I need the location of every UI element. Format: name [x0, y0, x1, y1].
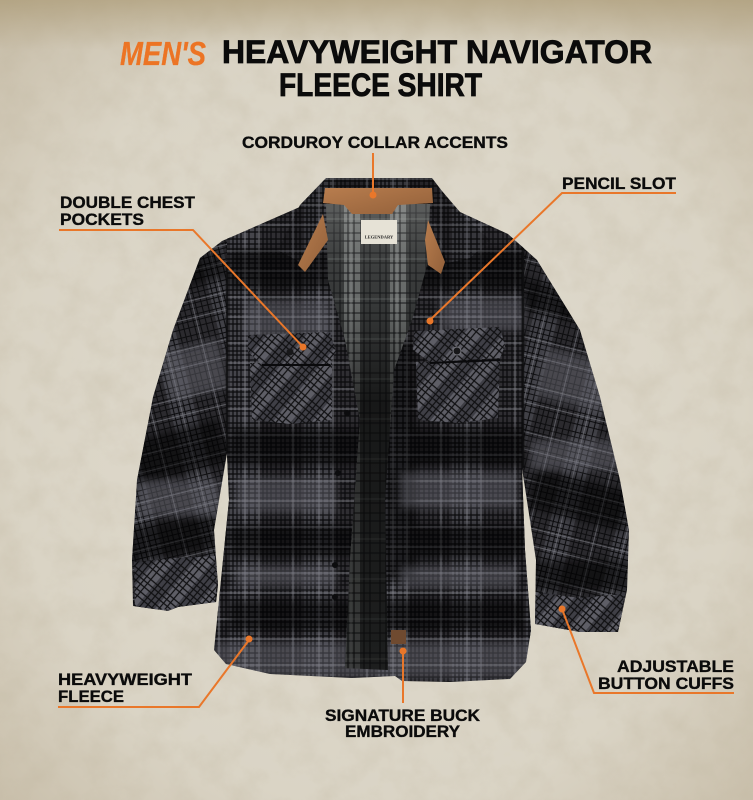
buck embroidery patch — [391, 630, 406, 644]
corduroy collar — [298, 188, 445, 274]
left sleeve — [132, 237, 231, 620]
inner lining — [326, 204, 430, 670]
callout: pencil slot — [426, 175, 676, 324]
callout: signature buck embroidery — [325, 648, 480, 741]
placket buttons — [332, 410, 350, 600]
plaid tonal bands — [123, 246, 633, 678]
callout: signature buck embroidery: SIGNATURE BUCK — [325, 707, 480, 725]
right chest pocket — [413, 327, 505, 423]
collar stand and wings — [278, 178, 490, 263]
callout: signature buck embroidery: EMBROIDERY — [345, 723, 460, 741]
callout: double chest pockets: POCKETS — [60, 211, 144, 229]
callout: double chest pockets — [59, 194, 306, 350]
right cuff — [533, 592, 624, 634]
right sleeve — [520, 244, 629, 640]
neck label — [361, 220, 397, 244]
callout: adjustable button cuffs: ADJUSTABLE — [617, 658, 734, 676]
callout: heavyweight fleece — [58, 636, 252, 707]
callout: corduroy collar accents — [242, 134, 508, 198]
title line 1: HEAVYWEIGHT NAVIGATOR — [222, 34, 652, 70]
title accent: MEN'S: MEN'S — [120, 35, 206, 72]
callout: pencil slot: PENCIL SLOT — [562, 175, 676, 193]
callout: adjustable button cuffs: BUTTON CUFFS — [598, 675, 734, 693]
sleeve seams — [227, 246, 523, 468]
title — [120, 34, 652, 103]
body — [208, 170, 537, 690]
left chest pocket — [248, 332, 336, 424]
neck label: LEGENDARY — [365, 234, 394, 240]
left cuff — [134, 556, 218, 610]
callout: heavyweight fleece: FLEECE — [58, 688, 124, 706]
title line 2: FLEECE SHIRT — [279, 67, 482, 103]
callout: double chest pockets: DOUBLE CHEST — [60, 194, 195, 212]
callout: corduroy collar accents: CORDUROY COLLAR ACCENTS — [242, 134, 508, 152]
callout: heavyweight fleece: HEAVYWEIGHT — [58, 671, 192, 689]
callout: adjustable button cuffs — [558, 606, 734, 693]
shirt illustration — [123, 170, 635, 690]
